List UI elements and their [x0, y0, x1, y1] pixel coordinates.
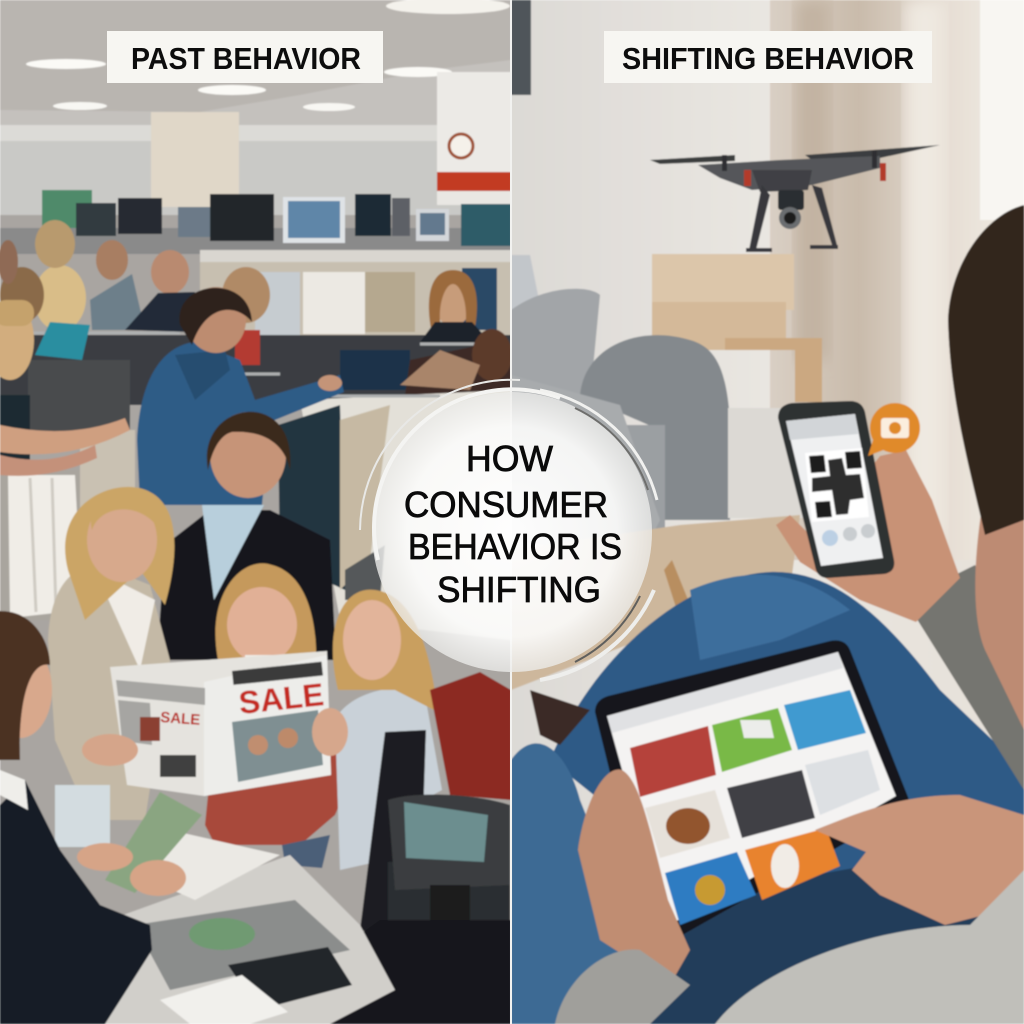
sweater sleeve holding phone	[905, 565, 1024, 790]
clothing racks background	[0, 250, 511, 640]
hand holding phone	[776, 450, 960, 622]
sale newspaper: SALE	[237, 676, 326, 721]
curtains	[511, 0, 1024, 560]
phone with QR code	[778, 401, 894, 578]
label: shifting behavior: SHIFTING BEHAVIOR	[622, 41, 914, 76]
tablet with shopping catalogue	[595, 640, 909, 943]
pointing hand	[815, 795, 1024, 925]
legs in denim jeans	[511, 572, 1024, 1024]
family: daughter with plaid shirt	[205, 563, 355, 868]
family: father	[157, 412, 336, 660]
title text: HOW	[466, 438, 553, 479]
black shopping bag and card terminal	[325, 730, 511, 1024]
electronics monitors row	[0, 194, 511, 254]
panel: shifting behavior living room scene	[511, 0, 1024, 1024]
title text: CONSUMER	[404, 484, 608, 525]
label: past behavior	[107, 31, 383, 83]
label: shifting behavior	[604, 31, 932, 83]
family: mother	[48, 487, 174, 820]
sale newspaper: SALE	[160, 709, 201, 729]
floor	[511, 515, 800, 690]
title text: BEHAVIOR IS	[408, 526, 622, 567]
label: past behavior: PAST BEHAVIOR	[131, 41, 361, 76]
divider between panels	[510, 0, 512, 1024]
checkout counter	[55, 785, 395, 1024]
sales clerk	[0, 611, 186, 1024]
store ceiling	[0, 0, 511, 135]
sale newspaper	[82, 651, 348, 796]
panel: past behavior store scene	[0, 0, 512, 1024]
hand holding tablet	[578, 770, 690, 985]
drone	[650, 145, 940, 252]
family: younger girl	[333, 590, 511, 870]
armchair	[512, 254, 804, 530]
man in blue shirt	[137, 287, 344, 505]
icon: orange ticket badge	[868, 403, 920, 456]
title text: SHIFTING	[437, 569, 601, 610]
back wall and pillars	[0, 72, 511, 230]
person head and sleeve	[555, 205, 1024, 1024]
cardboard boxes and side table	[652, 254, 822, 402]
background shoppers	[0, 220, 512, 476]
central title circle	[360, 380, 657, 680]
